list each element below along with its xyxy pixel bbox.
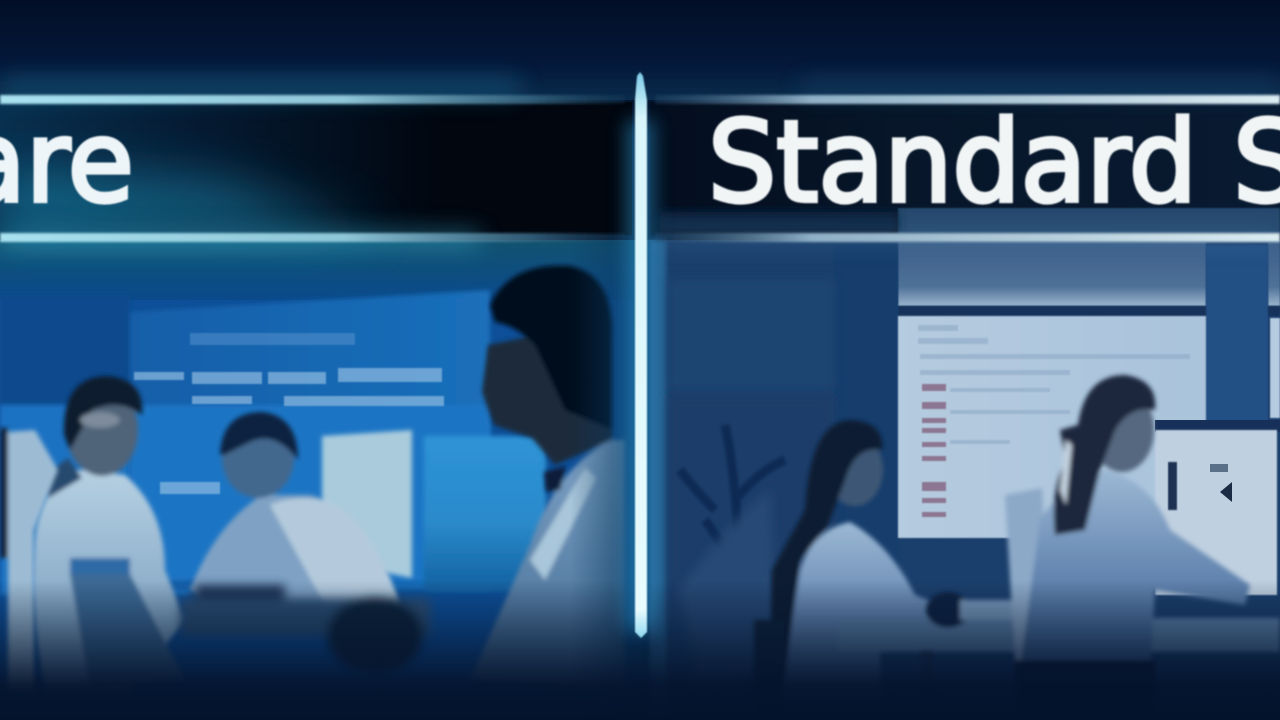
window frame bar (898, 306, 1280, 316)
right fade left scene (570, 240, 650, 720)
glow: vertical divider (626, 120, 654, 630)
person: standing woman (1005, 375, 1250, 720)
desk (180, 585, 430, 673)
person: centre seated (190, 412, 402, 625)
person: right man in profile (470, 266, 625, 690)
plant (680, 425, 785, 560)
panel: right office scene (650, 240, 1280, 720)
glow around lines (0, 78, 1280, 246)
wall display (130, 290, 546, 592)
person: seated woman (754, 420, 940, 720)
divider: bottom right line (655, 233, 1280, 242)
pillars (834, 245, 898, 575)
divider: bottom left line (0, 233, 625, 242)
divider: top left line (0, 95, 625, 104)
panel: right title band (650, 97, 1280, 235)
top strip (0, 0, 1280, 100)
panel: left title band (0, 97, 632, 235)
large whiteboard (898, 316, 1206, 538)
monitor (1155, 420, 1280, 595)
chair and plant pot (680, 490, 780, 690)
bottom fade across scenes (0, 580, 1280, 720)
desk (838, 592, 1280, 720)
person: left man (33, 376, 185, 690)
window upper (898, 242, 1206, 306)
vertical divider (635, 72, 647, 638)
left edge figure (0, 428, 58, 690)
panel: left office scene (0, 240, 650, 720)
divider: top right line (655, 95, 1280, 104)
